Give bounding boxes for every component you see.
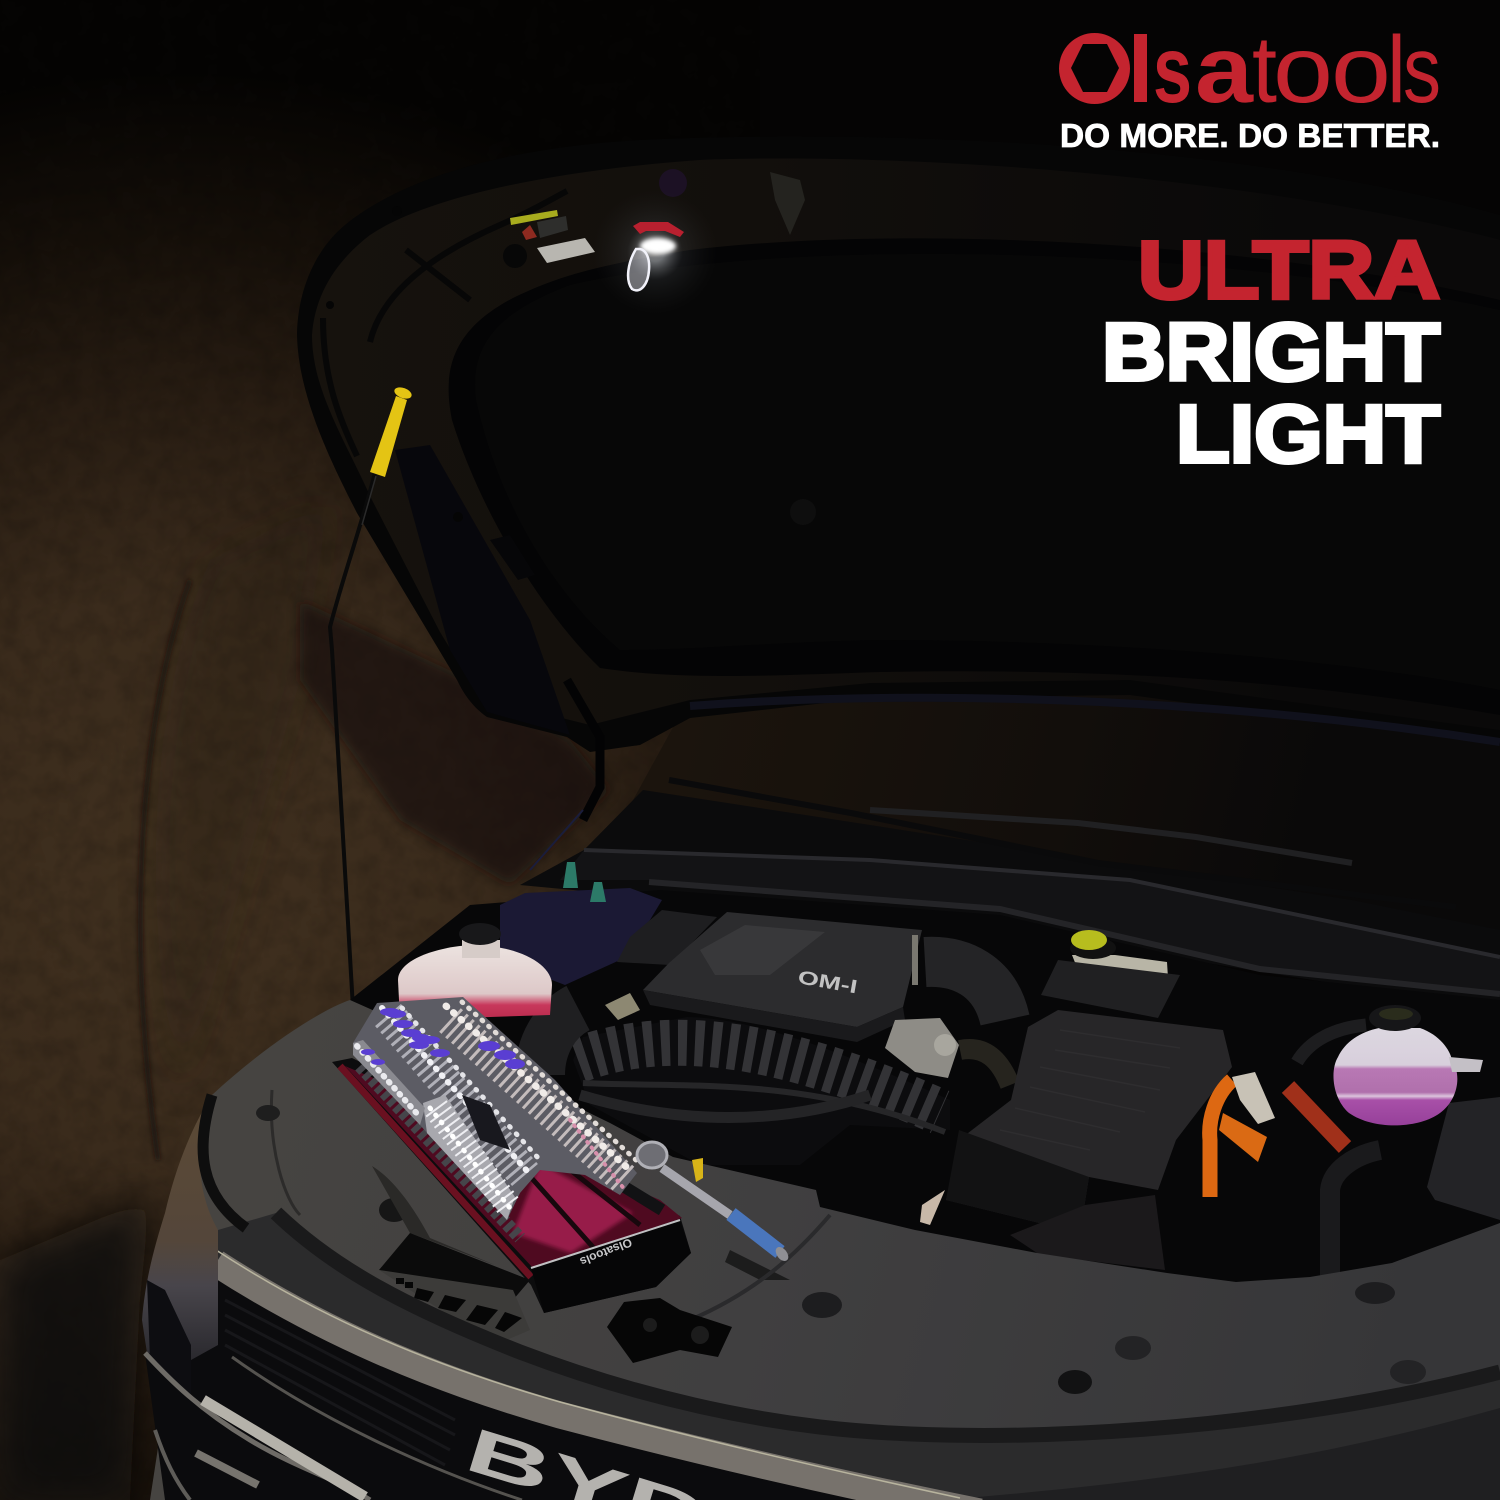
chrome body line bbox=[216, 1263, 980, 1500]
socket block: short row bbox=[353, 1040, 425, 1125]
corrugated hose bbox=[540, 1008, 578, 1075]
hood insulation pad bbox=[475, 254, 1500, 690]
red side rail bbox=[340, 1066, 531, 1277]
socket block: full silver mass bbox=[353, 997, 637, 1220]
left fender bbox=[142, 1095, 218, 1360]
bay shadow bbox=[350, 890, 1500, 1290]
dark lower-left hood channel bbox=[395, 445, 570, 735]
keyhole bbox=[256, 1105, 280, 1121]
textured stucco wall bbox=[0, 0, 760, 1500]
tray bracket recess bbox=[379, 1233, 530, 1300]
saw-tooth tray shadow bbox=[372, 1166, 495, 1265]
socket block: middle row streaks bbox=[388, 1015, 525, 1175]
air filter cover bbox=[643, 912, 922, 1042]
logo O with hex socket bbox=[1059, 33, 1130, 104]
tagline: DO MORE. DO BETTER. bbox=[1060, 117, 1440, 154]
cowl top highlight bbox=[584, 850, 1500, 957]
socket organizer tray bbox=[332, 997, 691, 1313]
headline word: LIGHT: LIGHT bbox=[1176, 389, 1440, 480]
handle end cap bbox=[773, 1245, 791, 1263]
ratchet shaft bbox=[662, 1168, 730, 1215]
panel fastener holes bbox=[802, 1282, 1426, 1394]
cross-shaped recess with bolts bbox=[607, 1298, 732, 1363]
ribbed intake manifold bbox=[573, 1017, 950, 1165]
yellow clip bbox=[692, 1158, 703, 1182]
magenta reflections bbox=[513, 1163, 633, 1253]
small chrome bar bbox=[196, 1453, 258, 1485]
brand logo bbox=[1059, 17, 1441, 123]
chrome grille bar bbox=[203, 1400, 365, 1497]
dark front body bbox=[145, 1277, 920, 1500]
teal caps bbox=[563, 862, 606, 902]
blue wire bbox=[530, 810, 583, 870]
letter t: t bbox=[1252, 17, 1277, 123]
wordmark: bold part bbox=[1134, 17, 1254, 123]
socket block: back row streaks bbox=[450, 1020, 625, 1180]
right black component block bbox=[1427, 1097, 1500, 1220]
rod bbox=[330, 473, 375, 1008]
wordmark letter O: O bbox=[1062, 24, 1127, 118]
cowl band bbox=[560, 850, 1500, 992]
heater hose bbox=[1297, 1025, 1366, 1062]
lower hood edge bbox=[940, 1408, 1500, 1500]
wiper arm bbox=[669, 780, 1456, 907]
LED hot spot bbox=[640, 238, 676, 254]
silver pipe fitting bbox=[605, 993, 640, 1020]
foam-covered battery box bbox=[946, 1010, 1232, 1233]
letter l: l bbox=[1387, 17, 1406, 123]
red light housing bbox=[633, 222, 684, 237]
second lower chrome strip bbox=[155, 1430, 190, 1500]
hood outer shell bbox=[297, 136, 1500, 752]
purple socket ends bbox=[361, 1008, 525, 1069]
letter o: o bbox=[1273, 17, 1333, 123]
letter l bbox=[1134, 34, 1147, 102]
ratchet head bbox=[637, 1142, 667, 1168]
thin chrome line bbox=[232, 1357, 522, 1500]
rail clips bbox=[360, 1066, 520, 1238]
intake duct and throttle body bbox=[885, 935, 1010, 1085]
hood inner rail bbox=[323, 191, 567, 456]
letter a: a bbox=[1195, 17, 1254, 123]
socket sparkles bbox=[357, 1002, 636, 1208]
vent slots bbox=[396, 1278, 522, 1332]
black rim around insulation pad bbox=[449, 238, 1500, 715]
black fuse box bbox=[617, 910, 717, 965]
yellow handle bbox=[370, 385, 413, 477]
hood brown inner frame bbox=[312, 158, 1500, 730]
air filter cover: OM-I bbox=[796, 967, 859, 998]
curved panel ridge bbox=[271, 1090, 300, 1215]
cowl and wipers bbox=[520, 780, 1500, 1010]
rod highlight bbox=[362, 476, 376, 525]
plastic engine cover panel bbox=[150, 1000, 1500, 1500]
rubber seal bbox=[276, 1213, 1500, 1435]
bundled wiring bbox=[1330, 1150, 1380, 1277]
crimson tray surface bbox=[345, 1066, 682, 1268]
wiper well bbox=[520, 790, 1500, 1010]
letter s: s bbox=[1153, 17, 1192, 123]
wiper blade bar bbox=[870, 810, 1352, 863]
round vent bbox=[379, 1198, 409, 1222]
red and white bay label bbox=[920, 1190, 945, 1225]
headline word: ULTRA: ULTRA bbox=[1138, 225, 1440, 316]
hood strut chain bbox=[567, 680, 600, 820]
yellow hood prop rod bbox=[330, 385, 413, 1008]
chrome highlight bbox=[216, 1250, 960, 1498]
raised ridge by ratchet bbox=[690, 1215, 830, 1320]
blue handle bbox=[731, 1214, 780, 1252]
centre dividers bbox=[520, 1150, 640, 1255]
right clip row bbox=[540, 1135, 662, 1210]
letter s: s bbox=[1403, 17, 1441, 123]
wordmark: light part bbox=[1252, 17, 1441, 123]
hood hardware details bbox=[326, 169, 816, 580]
engine bay bbox=[350, 862, 1500, 1290]
car front: trim, grille and badge bbox=[142, 1095, 1500, 1500]
ratchet cast shadow bbox=[725, 1250, 790, 1280]
windshield seen under the hood bbox=[600, 680, 1500, 960]
lower engine block bbox=[1010, 1195, 1165, 1270]
coolant reservoir: pink bbox=[1333, 1005, 1483, 1125]
ratchet wrench bbox=[637, 1142, 791, 1263]
cover panel surface details bbox=[256, 1090, 1426, 1394]
carabiner bbox=[628, 249, 649, 290]
open car hood bbox=[297, 136, 1500, 870]
dark gap between socket rows bbox=[462, 1095, 510, 1150]
tray body bbox=[332, 1058, 691, 1313]
LED work light with carabiner bbox=[593, 190, 717, 314]
orange high voltage cables bbox=[1210, 1072, 1345, 1197]
socket block: front deep row bbox=[423, 1095, 515, 1220]
grille mesh lines bbox=[225, 1300, 455, 1465]
cowl lower rail bbox=[649, 882, 1500, 994]
black fender gasket bbox=[203, 1095, 246, 1228]
light glow bbox=[593, 190, 717, 314]
lower chrome grille trim bbox=[145, 1353, 370, 1500]
coolant reservoir: white bbox=[398, 923, 552, 1020]
headline word: BRIGHT: BRIGHT bbox=[1102, 307, 1440, 398]
lighter slotted plate bbox=[379, 1270, 530, 1345]
tray end plate with logo: Olsatools bbox=[578, 1235, 634, 1269]
tray end plate with logo bbox=[531, 1220, 691, 1313]
brake fluid reservoir with yellow cap bbox=[1041, 930, 1180, 1018]
purple strut tower bbox=[500, 888, 662, 985]
warning labels bbox=[510, 210, 595, 263]
dark badge strip bbox=[147, 1280, 191, 1397]
letter o: o bbox=[1331, 17, 1391, 123]
headline bbox=[1102, 225, 1440, 480]
strip under seal bbox=[216, 1213, 1500, 1500]
hood edge blue sheen bbox=[690, 698, 1500, 742]
